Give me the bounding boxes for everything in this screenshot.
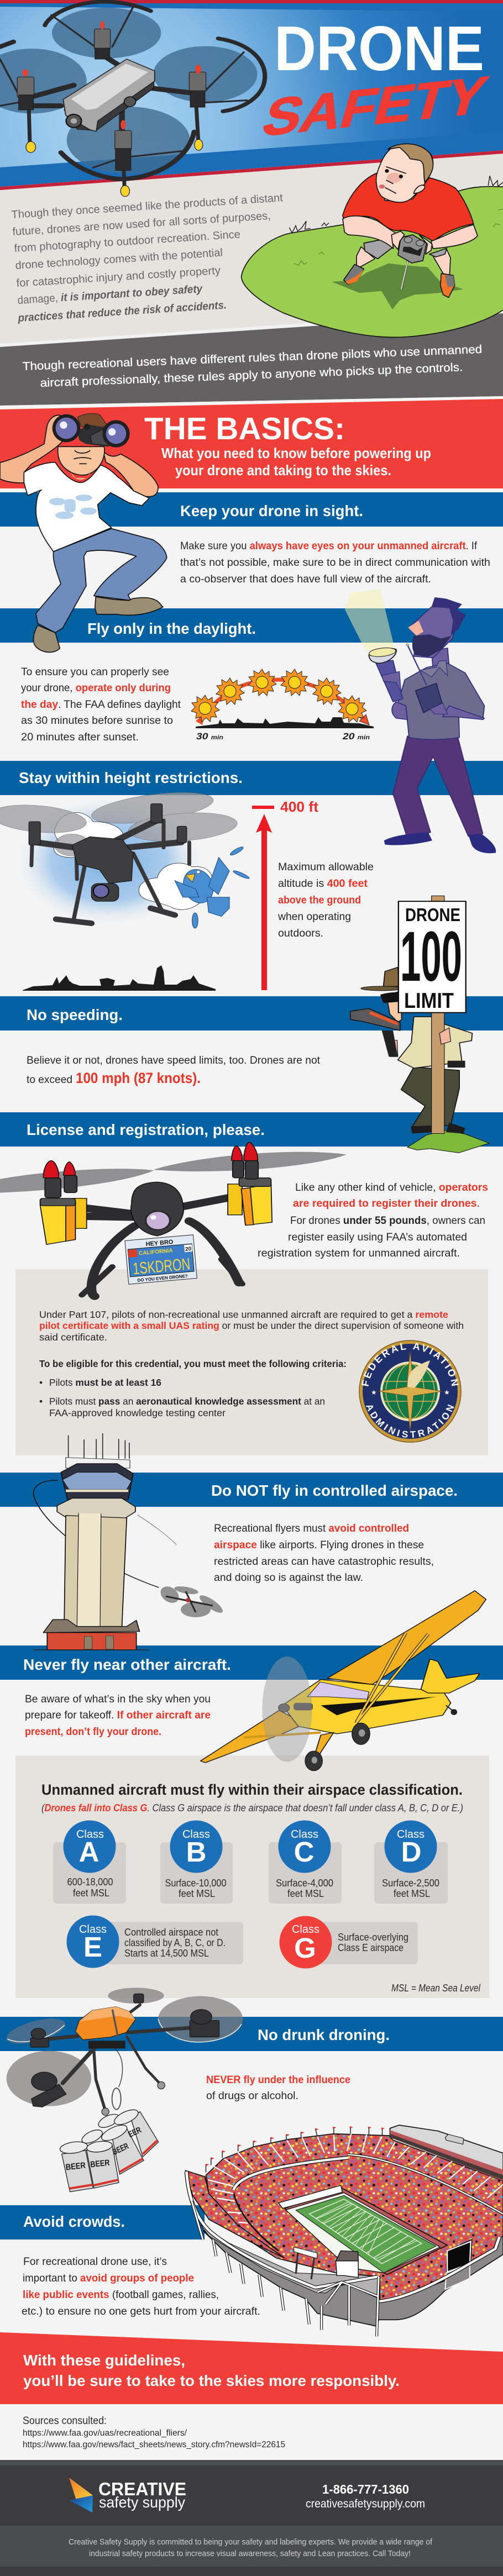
infield and pitch (285, 2188, 447, 2275)
class E: Controlled airspace not (124, 1926, 218, 1938)
concourse (201, 2225, 379, 2299)
intro text: from photography to outdoor recreation. Since (14, 228, 241, 255)
text: part 107: Under Part 107, pilots of non-recreational use unmanned aircraft are required to get a remote (39, 1309, 448, 1320)
text: registration (258, 1182, 488, 1259)
text: other aircraft: present, don’t fly your drone. (25, 1726, 161, 1738)
sources: https://www.faa.gov/news/fact_sheets/news_story.cfm?newsId=22615 (23, 2440, 285, 2449)
airspace heading (41, 1781, 463, 1813)
class E: Class (79, 1923, 107, 1936)
illustration: grass patch and pilot looking up (242, 144, 503, 337)
text: height: when operating (277, 911, 351, 923)
illustration: man with binoculars (0, 413, 167, 652)
company blurb: industrial safety products to increase visual awareness, safety and Lean practices. Call Today! (89, 2549, 411, 2558)
class E: Starts at 14,500 MSL (124, 1947, 209, 1959)
seating bowl (206, 2134, 503, 2300)
class E: classified by A, B, C, or D. (124, 1937, 226, 1948)
illustration: tello style drone (0, 2, 265, 197)
text: drunk droning: NEVER fly under the influence (206, 2074, 350, 2086)
class G (280, 1916, 418, 1968)
heading: the basics (144, 411, 431, 479)
rim and pillars (186, 2172, 499, 2301)
text: height: Maximum allowable (278, 861, 374, 873)
text: part 107: Pilots must be at least 16 (49, 1377, 161, 1388)
illustration: large drone with bird (0, 787, 250, 928)
license plate: 20 (185, 1246, 192, 1253)
recreational users text (22, 343, 483, 390)
flags (206, 2127, 382, 2173)
class C (269, 1820, 342, 1904)
illustration: yellow airplane (201, 1591, 486, 1771)
text: height (277, 861, 374, 939)
illustration: quad drone carrying beer (4, 1988, 243, 2192)
text: speeding: 100 mph (87 knots). (76, 1070, 201, 1086)
contact: creativesafetysupply.com (306, 2498, 425, 2510)
illustration: quad drone carrying beer: BEER (111, 2142, 130, 2157)
section heading: height: Stay within height restrictions. (19, 769, 243, 786)
silhouette: field with person (23, 965, 216, 991)
text: controlled airspace: Recreational flyers must avoid controlled (214, 1523, 409, 1534)
section heading: drunk droning: No drunk droning. (258, 2026, 390, 2043)
text: daylight: 20 minutes after sunset. (21, 732, 139, 743)
intro text: for catastrophic injury and costly property (16, 265, 221, 290)
logo icon (69, 2478, 93, 2512)
grey recreational panel (0, 310, 503, 409)
text: speeding: Believe it or not, drones have speed limits, too. Drones are not (27, 1055, 321, 1066)
logo wordmark: safety supply (99, 2494, 185, 2511)
text: part 107 (39, 1309, 464, 1418)
text: part 107: • (39, 1377, 43, 1388)
contact (306, 2482, 425, 2510)
red basics banner (0, 399, 503, 488)
illustration: control tower (34, 1433, 176, 1650)
closing message: With these guidelines, (23, 2352, 185, 2369)
intro panel background (0, 154, 503, 344)
class B: feet MSL (179, 1888, 215, 1899)
panel: part 107 (15, 1269, 488, 1455)
illustration: quad drone carrying beer: EER (127, 2125, 143, 2139)
license plate: HEY BRO (145, 1239, 174, 1248)
tier dividers (208, 2134, 503, 2251)
illustration: quad drone carrying beer: BEER (90, 2158, 110, 2169)
recreational users text: Though recreational users have different rules than drone pilots who use unmanned (22, 343, 483, 373)
section header bars (0, 492, 503, 2239)
class D: D (401, 1836, 421, 1868)
text: registration: Like any other kind of vehicle, operators (295, 1182, 488, 1194)
recreational users text: aircraft professionally, these rules apply to anyone who picks up the controls. (40, 361, 463, 390)
section heading: other aircraft: Never fly near other aircraft. (23, 1656, 231, 1673)
class D: Class (397, 1828, 425, 1841)
airspace heading: Unmanned aircraft must fly within their airspace classification. (41, 1781, 463, 1798)
class C: C (294, 1836, 314, 1868)
section heading: daylight: Fly only in the daylight. (87, 620, 256, 637)
text: drunk droning: of drugs or alcohol. (206, 2090, 298, 2102)
panel: airspace classes (15, 1755, 489, 1998)
class B: Class (182, 1828, 210, 1841)
license plate: DO YOU EVEN DRONE? (137, 1274, 188, 1283)
text: part 107: pilot certificate with a small UAS rating or must be under the direct supervision of someone with (39, 1320, 464, 1331)
text: part 107: To be eligible for this credential, you must meet the following criteria: (39, 1358, 347, 1369)
sign text: DRONE (405, 905, 460, 925)
section heading: license: License and registration, please. (27, 1121, 265, 1138)
label: 400 ft: 400 ft (280, 798, 318, 815)
text: speeding: to exceed (27, 1074, 72, 1086)
title: safety: SAFETY (256, 65, 493, 148)
text: registration: register easily using FAA’s automated (288, 1232, 467, 1243)
class C: feet MSL (287, 1888, 324, 1899)
sign text (400, 905, 462, 1013)
tunnel (447, 2242, 471, 2272)
illustration: small drone near tower (158, 1583, 225, 1617)
text: height: altitude is 400 feet (278, 878, 368, 890)
class G: G (294, 1932, 316, 1964)
text: daylight: as 30 minutes before sunrise to (21, 715, 173, 727)
class C: Surface-4,000 (276, 1877, 333, 1889)
logo wordmark (98, 2479, 186, 2511)
text: daylight: your drone, operate only during (21, 682, 171, 694)
class A: feet MSL (73, 1887, 109, 1899)
class D: Surface-2,500 (382, 1877, 439, 1889)
class A: Class (76, 1828, 104, 1841)
text: drunk droning (206, 2074, 350, 2102)
footer (0, 2460, 503, 2576)
illustration: officer with drone speed limit sign (350, 896, 489, 1153)
height limit arrow (252, 806, 274, 990)
closing message: you’ll be sure to take to the skies more responsibly. (23, 2372, 400, 2389)
header banner (0, 0, 503, 191)
intro text: Though they once seemed like the products of a distant (11, 192, 284, 221)
FAA seal: ★ (444, 1389, 450, 1396)
text: part 107: • (39, 1396, 43, 1407)
under structure (203, 2231, 503, 2326)
airspace heading: (Drones fall into Class G. Class G airspace is the airspace that doesn’t fall under class A, B, C, D or E.) (41, 1802, 463, 1813)
class E: E (83, 1931, 102, 1963)
text: crowds: etc.) to ensure no one gets hurt from your aircraft. (22, 2306, 260, 2317)
sign text: LIMIT (404, 989, 454, 1013)
text: daylight: the day. The FAA defines daylight (21, 699, 181, 711)
closing red banner (0, 2332, 503, 2404)
text: other aircraft (25, 1694, 211, 1738)
daylight arc diagram (191, 669, 374, 742)
text: controlled airspace: restricted areas can have catastrophic results, (214, 1556, 434, 1568)
company blurb: Creative Safety Supply is committed to being your safety and labeling experts. We provide a wide range of (69, 2537, 433, 2547)
intro text: damage, it is important to obey safety (17, 283, 203, 307)
class A: 600-18,000 (67, 1876, 113, 1888)
text: other aircraft: prepare for takeoff. If other aircraft are (25, 1710, 211, 1721)
text: part 107: said certificate. (39, 1332, 107, 1343)
text: daylight: To ensure you can properly see (21, 666, 169, 678)
text: controlled airspace: and doing so is against the law. (214, 1572, 363, 1584)
sources: Sources consulted: (23, 2415, 107, 2427)
illustration: drone with license plate (0, 1142, 347, 1296)
press box (336, 2261, 358, 2278)
illustration: stadium (186, 2125, 503, 2336)
heading: the basics: your drone and taking to the skies. (175, 462, 391, 479)
illustration: man with flashlight (345, 589, 496, 853)
legend: MSL: MSL = Mean Sea Level (391, 1983, 481, 1994)
arc labels: 20 min (342, 731, 370, 742)
bird (175, 845, 250, 928)
class D (374, 1820, 448, 1904)
class B (160, 1820, 233, 1904)
text: keep in sight: that’s not possible, make sure to be in direct communication with (180, 557, 490, 569)
text: part 107: FAA-approved knowledge testing center (49, 1407, 226, 1418)
contact: 1-866-777-1360 (322, 2482, 409, 2496)
intro text: drone technology comes with the potential (15, 246, 223, 272)
text: crowds: important to avoid groups of people (23, 2273, 194, 2284)
company blurb (69, 2537, 433, 2558)
section heading: controlled airspace: Do NOT fly in controlled airspace. (211, 1482, 458, 1499)
sources (23, 2415, 285, 2449)
class D: feet MSL (394, 1888, 430, 1899)
binoculars (53, 414, 130, 448)
text: controlled airspace (214, 1523, 434, 1584)
license plate: 1SKDRON (132, 1255, 191, 1278)
title: drone: DRONE (274, 14, 484, 84)
arc labels (196, 731, 370, 742)
license plate (125, 1235, 197, 1284)
class B: B (186, 1836, 206, 1868)
FAA seal (359, 1340, 462, 1443)
intro text: practices that reduce the risk of accidents. (17, 299, 227, 324)
sources: https://www.faa.gov/uas/recreational_fliers/ (23, 2428, 187, 2438)
upper deck (390, 2125, 503, 2181)
text: height: above the ground (278, 895, 361, 906)
section heading: speeding: No speeding. (27, 1006, 123, 1023)
text: keep in sight: Make sure you always have eyes on your unmanned aircraft. If (180, 540, 478, 552)
class A (53, 1820, 126, 1904)
heading: the basics: What you need to know before powering up (161, 445, 431, 461)
text: keep in sight (180, 540, 490, 585)
text: registration: are required to register their drones . (293, 1198, 480, 1210)
class G: Class E airspace (338, 1942, 404, 1953)
text: keep in sight: a co-observer that does have full view of the aircraft. (180, 574, 431, 585)
horizon silhouette (196, 717, 374, 728)
FAA seal: ★ (371, 1389, 377, 1396)
text: registration: For drones under 55 pounds, owners can (290, 1215, 485, 1227)
text: daylight (21, 666, 181, 743)
text: height: outdoors. (278, 928, 323, 939)
class E (66, 1915, 243, 1968)
text: speeding (27, 1055, 321, 1086)
text: registration: registration system for unmanned aircraft. (258, 1248, 460, 1259)
FAA seal: FEDERAL AVIATION (361, 1343, 459, 1386)
class C: Class (291, 1828, 318, 1841)
illustration: quad drone carrying beer: BEER (65, 2161, 86, 2172)
text: controlled airspace: airspace like airports. Flying drones in these (214, 1539, 424, 1551)
license plate: CALIFORNIA (139, 1248, 173, 1257)
text: crowds: like public events (football games, rallies, (23, 2289, 219, 2301)
pilot (332, 144, 478, 309)
section heading: crowds: Avoid crowds. (23, 2213, 125, 2230)
text: part 107: Pilots must pass an aeronautical knowledge assessment at an (49, 1396, 325, 1407)
intro text (11, 192, 284, 324)
scoreboard (294, 2247, 317, 2279)
text: crowds (22, 2256, 260, 2317)
heading: the basics: THE BASICS: (144, 411, 345, 446)
class G: Surface-overlying (338, 1931, 408, 1943)
text: crowds: For recreational drone use, it’s (23, 2256, 167, 2268)
class A: A (79, 1836, 99, 1868)
intro text: future, drones are now used for all sorts of purposes, (12, 210, 271, 238)
section heading: keep in sight: Keep your drone in sight. (180, 502, 363, 519)
class G: Class (292, 1923, 319, 1936)
text: other aircraft: Be aware of what’s in the sky when you (25, 1694, 211, 1705)
closing message (23, 2352, 400, 2389)
grass patch (242, 176, 503, 337)
class B: Surface-10,000 (165, 1877, 227, 1889)
FAA seal: ADMINISTRATION (366, 1405, 454, 1438)
logo wordmark: CREATIVE (98, 2479, 186, 2499)
arc labels: 30 min (196, 731, 223, 742)
